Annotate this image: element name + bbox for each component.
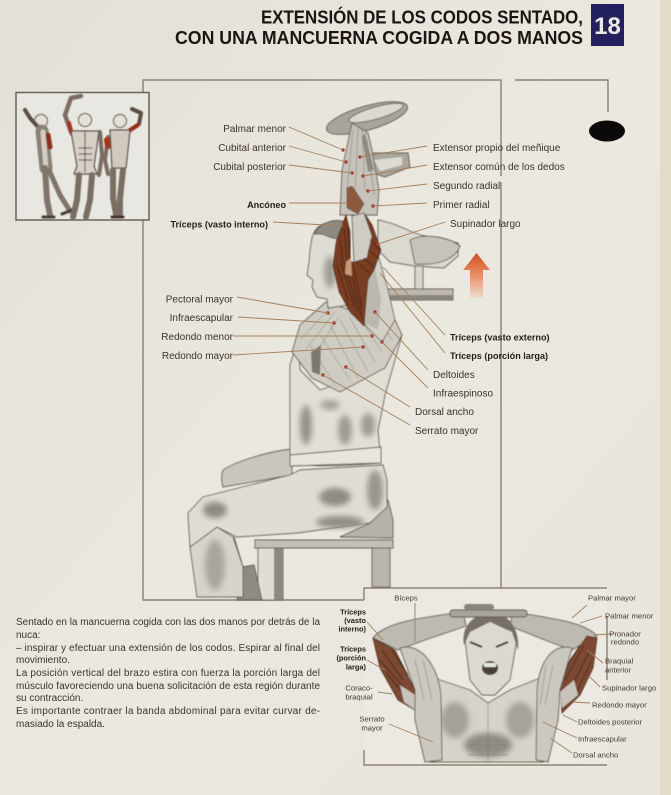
head bbox=[463, 612, 518, 695]
labels: right column: Serrato mayor bbox=[415, 426, 479, 437]
description text: Sentado en la mancuerna cogida con las dos manos por detrás de la bbox=[16, 617, 320, 628]
inset figure: right bbox=[105, 109, 141, 217]
triceps muscle bbox=[333, 213, 381, 326]
labels: front view right: Supinador largo bbox=[602, 684, 656, 692]
description text: músculo favoreciendo una buena solicitación de esta región durante bbox=[16, 681, 320, 692]
labels: right column: Deltoides bbox=[433, 370, 475, 381]
title: EXTENSIÓN DE LOS CODOS SENTADO, bbox=[261, 6, 583, 28]
labels: front view right: Deltoides posterior bbox=[578, 718, 643, 726]
labels: right column: Extensor propio del meñique bbox=[433, 143, 561, 154]
labels: right column: Tríceps (vasto externo) bbox=[450, 332, 550, 342]
description text bbox=[16, 617, 320, 730]
labels: front view right: Palmar mayor bbox=[588, 594, 636, 602]
torso bbox=[420, 675, 552, 762]
description text: nuca: bbox=[16, 630, 40, 641]
labels: left column: Infraescapular bbox=[170, 313, 234, 324]
labels: left column: Redondo menor bbox=[161, 332, 234, 343]
shirt bbox=[290, 335, 402, 466]
far leg bbox=[222, 449, 292, 600]
labels: front view left: mayor bbox=[361, 724, 383, 732]
top-right bracket bbox=[515, 80, 608, 112]
labels: left column: Cubital anterior bbox=[218, 143, 287, 154]
inset figure: centre bbox=[65, 96, 102, 217]
labels: left column: Pectoral mayor bbox=[166, 294, 234, 306]
hands and dumbbell bbox=[450, 604, 527, 617]
description text: La posición vertical del brazo estira con fuerza la porción larga del bbox=[16, 668, 320, 679]
labels: front view left: (porción bbox=[336, 654, 366, 662]
left arm bbox=[373, 612, 466, 762]
labels: right column: Infraespinoso bbox=[433, 388, 493, 400]
title bbox=[175, 6, 583, 48]
labels: front view left: Tríceps bbox=[340, 608, 366, 616]
labels: left column bbox=[161, 124, 287, 362]
far arm and lower dumbbell bbox=[378, 220, 460, 300]
labels: front view right: Braquial bbox=[605, 656, 633, 666]
labels: right column: Segundo radial bbox=[433, 181, 500, 192]
right arm bbox=[510, 612, 597, 762]
labels: front view left: larga) bbox=[346, 662, 367, 672]
upper dumbbell bbox=[323, 95, 411, 177]
panel frame bbox=[364, 588, 607, 765]
front view panel bbox=[336, 588, 656, 765]
arrow: upward movement bbox=[463, 253, 490, 298]
leader lines: front view bbox=[367, 603, 612, 753]
inset figure: left bbox=[25, 110, 72, 217]
labels: right column bbox=[415, 143, 565, 437]
labels: front view right bbox=[573, 594, 656, 760]
labels: front view left: Bíceps bbox=[394, 594, 418, 602]
labels: front view left: (vasto bbox=[344, 616, 366, 625]
back muscles bbox=[292, 302, 402, 392]
upper arm and deltoid bbox=[362, 255, 395, 342]
labels: right column: Tríceps (porción larga) bbox=[450, 351, 548, 361]
labels: front view left: braquial bbox=[345, 692, 373, 702]
labels: front view right: Dorsal ancho bbox=[573, 750, 618, 760]
labels: front view right: Pronador bbox=[609, 630, 641, 638]
labels: front view left: Serrato bbox=[359, 714, 385, 724]
description text: su contracción. bbox=[16, 693, 83, 704]
labels: front view right: anterior bbox=[605, 666, 632, 674]
description text: Es importante contraer la banda abdominal para evitar curvar de- bbox=[16, 706, 320, 717]
labels: front view left: Tríceps bbox=[340, 644, 366, 654]
labels: front view right: Palmar menor bbox=[605, 612, 654, 620]
number badge bbox=[591, 4, 624, 46]
main figure: seated man with dumbbell bbox=[188, 95, 460, 600]
labels: right column: Supinador largo bbox=[450, 219, 521, 230]
labels: front view right: Redondo mayor bbox=[592, 700, 647, 710]
labels: left column: Redondo mayor bbox=[162, 351, 234, 362]
forearm bbox=[340, 123, 379, 215]
near leg bbox=[188, 465, 387, 597]
labels: left column: Palmar menor bbox=[223, 124, 287, 135]
labels: front view left bbox=[336, 594, 418, 732]
labels: right column: Primer radial bbox=[433, 200, 490, 211]
description text: masiado la espalda. bbox=[16, 719, 105, 730]
title: CON UNA MANCUERNA COGIDA A DOS MANOS bbox=[175, 28, 583, 48]
leader lines: main figure bbox=[233, 127, 445, 425]
icon: black ellipse marker bbox=[589, 120, 625, 142]
labels: front view left: interno) bbox=[338, 624, 367, 634]
labels: left column: Ancóneo bbox=[247, 200, 286, 210]
inset: three anatomical figures bbox=[16, 92, 149, 220]
labels: front view left: Coraco- bbox=[345, 684, 373, 692]
labels: right column: Extensor común de los dedos bbox=[433, 162, 565, 173]
description text: – inspirar y efectuar una extensión de los codos. Espirar al final del bbox=[16, 643, 320, 654]
labels: front view right: redondo bbox=[611, 638, 639, 646]
labels: right column: Dorsal ancho bbox=[415, 407, 474, 418]
labels: left column: Tríceps (vasto interno) bbox=[170, 220, 268, 230]
muscle pointer dots bbox=[321, 148, 384, 377]
bench bbox=[255, 500, 393, 600]
description text: movimiento. bbox=[16, 655, 70, 666]
labels: front view right: Infraescapular bbox=[578, 734, 627, 744]
labels: left column: Cubital posterior bbox=[213, 162, 287, 173]
head bbox=[307, 220, 350, 308]
front view figure bbox=[373, 604, 597, 762]
main figure frame bbox=[143, 80, 501, 600]
number badge: 18 bbox=[594, 13, 621, 40]
